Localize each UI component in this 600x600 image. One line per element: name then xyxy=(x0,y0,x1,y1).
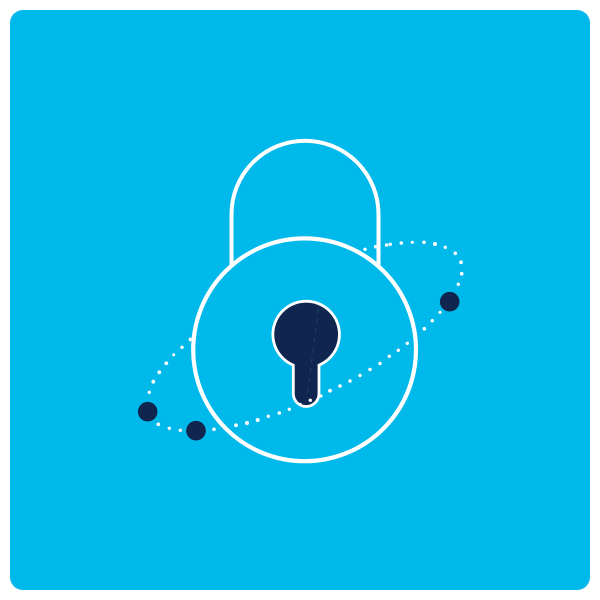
icon: navy node left xyxy=(138,402,158,422)
icon: padlock shackle xyxy=(232,141,378,266)
icon: navy node right xyxy=(440,292,460,312)
icon: navy node bottom xyxy=(186,421,206,441)
icon: orbit dots xyxy=(148,240,464,432)
icon: padlock body xyxy=(193,238,416,461)
icon: keyhole xyxy=(273,301,339,406)
